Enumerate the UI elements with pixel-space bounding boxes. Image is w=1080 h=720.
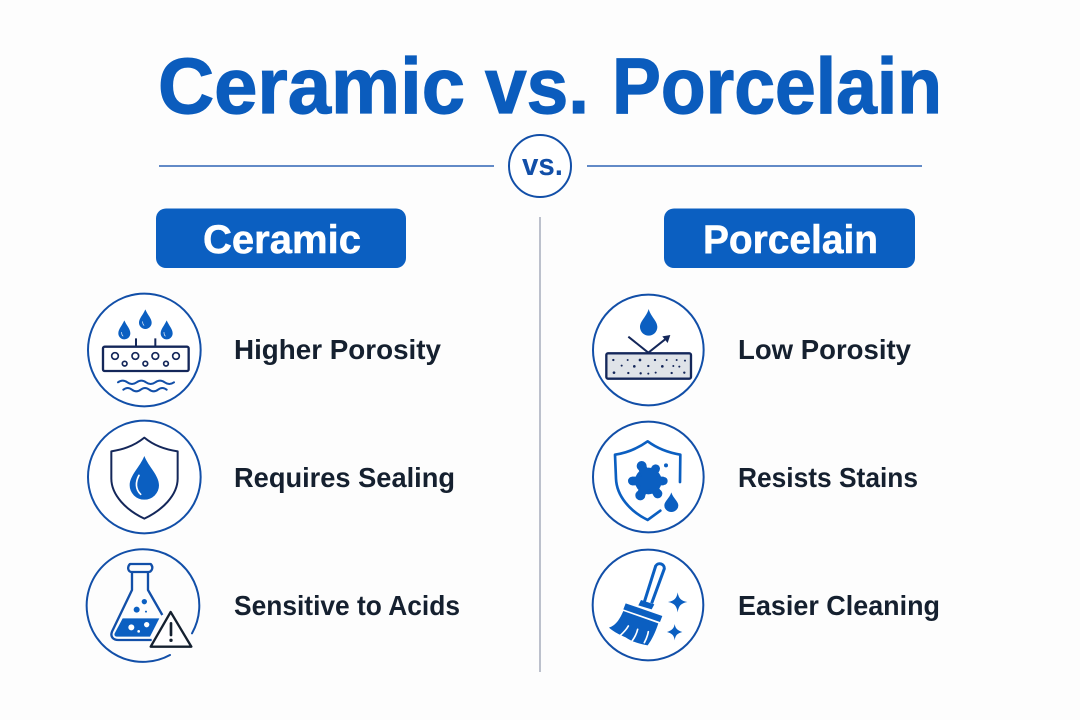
heading: Ceramic — [156, 208, 406, 268]
label: Low Porosity: Low Porosity — [738, 334, 911, 365]
icon: resists stains — [593, 422, 704, 532]
title: Porcelain — [612, 41, 942, 130]
heading: Porcelain — [664, 208, 915, 268]
icon: easier cleaning — [593, 550, 703, 660]
icon: requires sealing — [88, 421, 201, 533]
label: Sensitive to Acids: Sensitive to Acids — [234, 590, 460, 621]
heading: Porcelain: Porcelain — [703, 218, 878, 262]
title: Ceramic — [158, 41, 465, 130]
icon: higher porosity — [88, 294, 201, 406]
label: Easier Cleaning: Easier Cleaning — [738, 590, 940, 621]
label: Resists Stains: Resists Stains — [738, 462, 918, 493]
title — [158, 41, 942, 130]
vs badge — [509, 135, 571, 197]
vs badge: vs. — [522, 147, 563, 182]
label: Higher Porosity: Higher Porosity — [234, 334, 441, 365]
icon: low porosity — [593, 295, 704, 405]
icon: sensitive to acids — [87, 549, 199, 662]
heading: Ceramic: Ceramic — [203, 218, 361, 262]
title: vs. — [485, 41, 589, 130]
label: Requires Sealing: Requires Sealing — [234, 462, 455, 493]
